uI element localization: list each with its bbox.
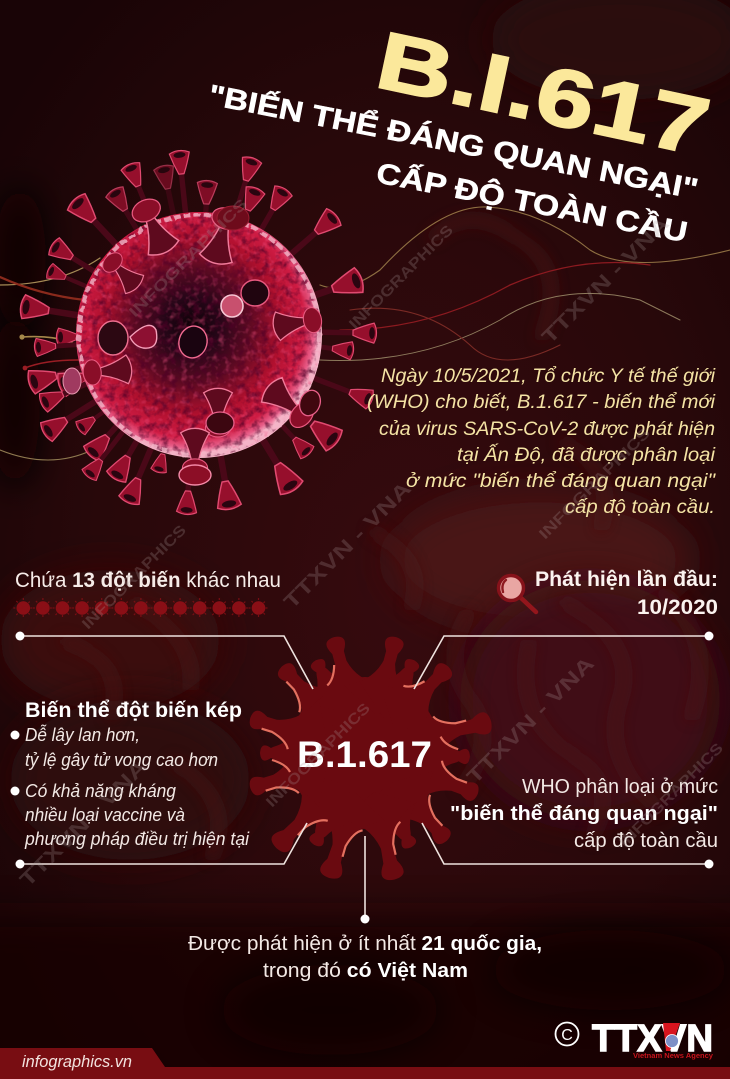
title line 3: CẤP ĐỘ TOÀN CẦU xyxy=(374,155,690,249)
watermarks: INFOGRAPHICS xyxy=(79,522,190,633)
watermarks: TTXVN - VNA xyxy=(16,756,152,892)
countries: Được phát hiện ở ít nhất 21 quốc gia, xyxy=(188,932,542,955)
copyright icon: C xyxy=(561,1027,573,1044)
double mutation block: tỷ lệ gây tử vong cao hơn xyxy=(25,749,218,770)
WHO classification: cấp độ toàn cầu xyxy=(574,829,718,852)
13 mutations label: Chứa 13 đột biến khác nhau xyxy=(15,569,281,592)
double mutation block: phương pháp điều trị hiện tại xyxy=(24,828,250,849)
title xyxy=(206,16,717,249)
connector lines xyxy=(16,632,714,924)
watermarks: TTXVN - VNA xyxy=(280,478,416,614)
WHO classification: WHO phân loại ở mức xyxy=(522,775,718,798)
countries: trong đó có Việt Nam xyxy=(263,959,468,982)
WHO classification xyxy=(450,775,718,852)
intro paragraph: Ngày 10/5/2021, Tổ chức Y tế thế giới xyxy=(381,366,716,387)
decorative threads around main virus xyxy=(0,207,730,460)
intro paragraph: của virus SARS-CoV-2 được phát hiện xyxy=(379,419,715,440)
intro paragraph: (WHO) cho biết, B.1.617 - biến thể mới xyxy=(367,392,716,413)
watermarks: INFOGRAPHICS xyxy=(536,425,654,543)
double mutation block: Có khả năng kháng xyxy=(25,780,177,801)
title: B.I.617: B.I.617 xyxy=(369,16,717,173)
first detected: Phát hiện lần đầu: xyxy=(535,568,718,591)
double mutation block: Dễ lây lan hơn, xyxy=(25,724,140,745)
intro paragraph xyxy=(367,366,716,518)
TTXVN logo: TTXVN xyxy=(592,1018,713,1060)
first detected: 10/2020 xyxy=(637,596,718,619)
TTXVN logo: Vietnam News Agency xyxy=(633,1051,714,1060)
watermarks: INFOGRAPHICS xyxy=(346,222,457,333)
watermarks xyxy=(16,196,727,892)
icon: magnifier xyxy=(498,576,536,612)
source label: infographics.vn xyxy=(22,1052,132,1071)
watermarks: INFOGRAPHICS xyxy=(263,700,374,811)
watermarks: INFOGRAPHICS xyxy=(616,740,727,851)
intro paragraph: cấp độ toàn cầu. xyxy=(565,497,715,518)
countries xyxy=(188,932,542,982)
mutation icon row xyxy=(13,598,268,618)
sphere body xyxy=(76,212,322,458)
outer spikes xyxy=(19,150,377,515)
surface spikes and rings xyxy=(63,194,324,485)
WHO classification: "biến thể đáng quan ngại" xyxy=(450,802,718,825)
first detected xyxy=(535,568,718,619)
copyright icon xyxy=(556,1022,578,1046)
title line 2: "BIẾN THỂ ĐÁNG QUAN NGẠI" xyxy=(206,77,701,206)
watermarks: TTXVN - VNA xyxy=(538,213,674,349)
double mutation block: nhiều loại vaccine và xyxy=(25,804,185,825)
bottom band xyxy=(0,1048,730,1079)
double mutation block xyxy=(10,698,250,849)
central virus label: B.1.617 xyxy=(297,734,432,775)
watermarks: INFOGRAPHICS xyxy=(126,196,251,321)
central virus badge xyxy=(239,627,500,888)
main coronavirus illustration xyxy=(19,150,377,515)
double mutation block: Biến thể đột biến kép xyxy=(25,698,242,722)
intro paragraph: ở mức "biến thể đáng quan ngại" xyxy=(406,471,716,492)
intro paragraph: tại Ấn Độ, đã được phân loại xyxy=(457,444,716,466)
watermarks: TTXVN - VNA xyxy=(463,653,599,789)
